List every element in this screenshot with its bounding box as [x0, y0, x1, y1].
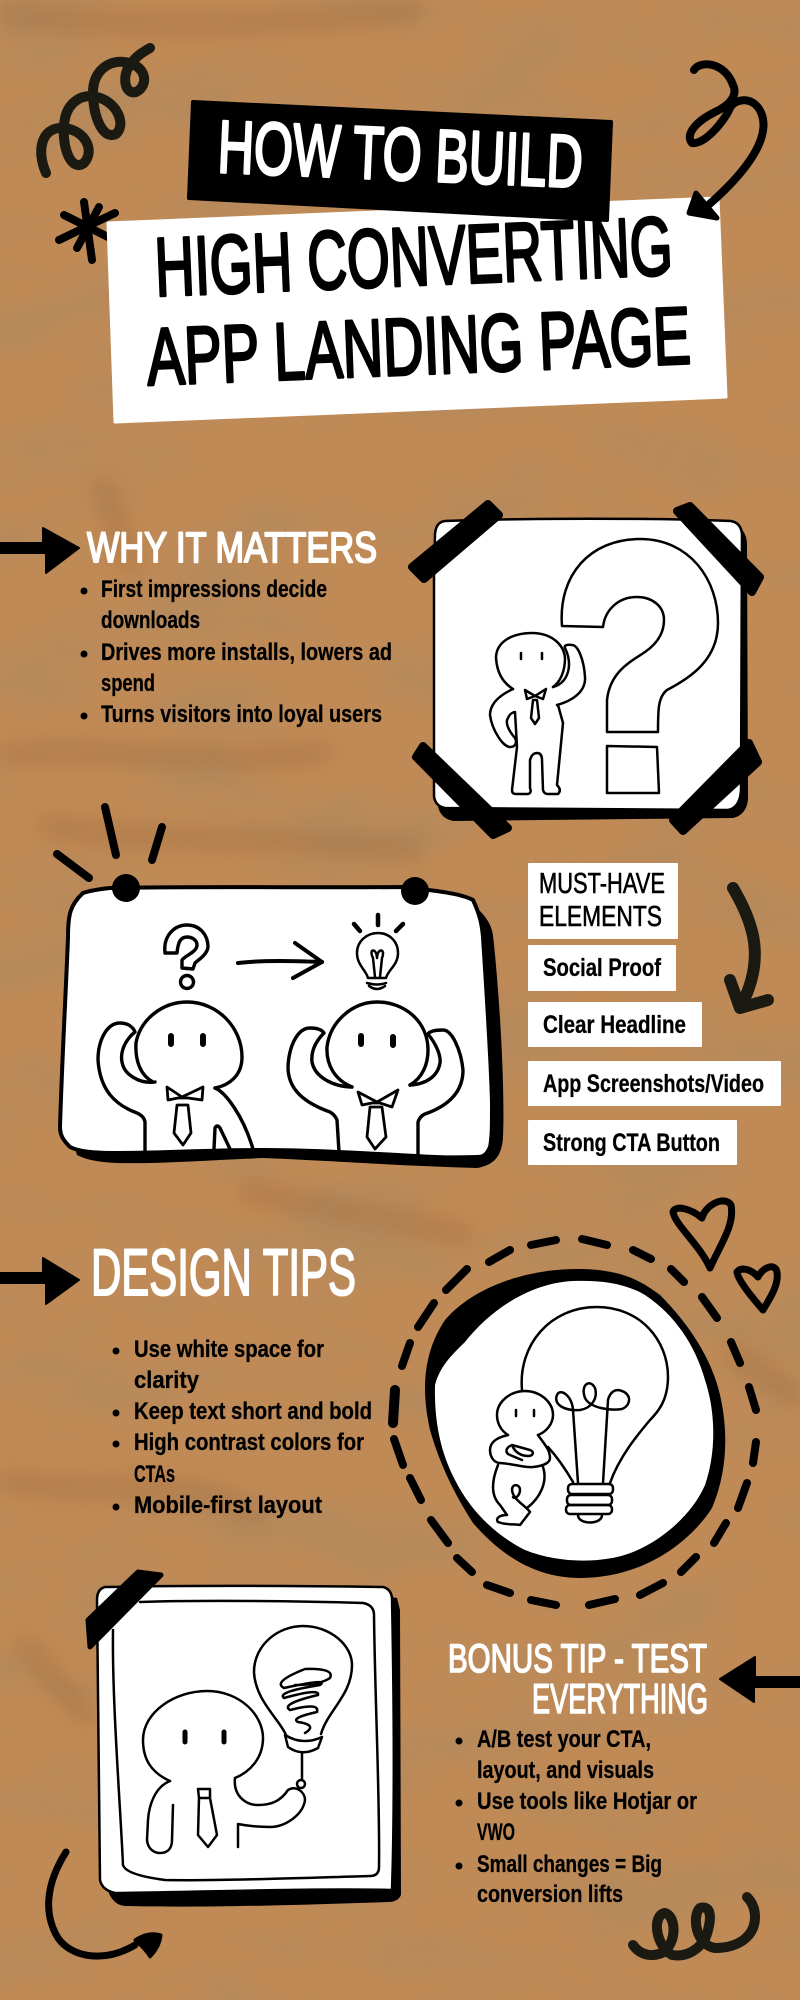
text block: why it matters bullets: First impressions decide [101, 576, 327, 603]
label: must-have elements [528, 863, 678, 939]
arrow: bonus tip [720, 1657, 800, 1702]
text block: design tips bullets: High contrast colors for [134, 1429, 364, 1456]
text block: bonus tip bullets: Use tools like Hotjar or [477, 1788, 697, 1815]
tape: top right [677, 506, 760, 592]
decoration: dashed ring [393, 1239, 756, 1605]
text block: bonus tip bullets: Small changes = Big [477, 1851, 662, 1878]
icon: small question mark [165, 925, 208, 988]
heading: bonus tip - test everything [448, 1637, 708, 1722]
title line: How To Build: HOW TO BUILD [216, 105, 584, 203]
circle white [435, 1281, 713, 1561]
figure: thinking person [98, 1002, 253, 1150]
decoration: asterisk [59, 202, 115, 260]
text block: bonus tip bullets: layout, and visuals [477, 1757, 654, 1784]
black title banner [189, 102, 611, 220]
tape: bottom left [416, 746, 508, 835]
text block: design tips bullets: Keep text short and bold [134, 1398, 372, 1425]
heading: bonus tip - test everything: BONUS TIP - TEST [448, 1637, 707, 1681]
icon: small light bulb [354, 915, 403, 989]
icon: small heart [737, 1267, 777, 1310]
text block: bonus tip bullets: A/B test your CTA, [477, 1726, 651, 1753]
icon: person thinking [490, 633, 585, 794]
text block: design tips bullets: Use white space for [134, 1336, 324, 1363]
arrow: design tips [0, 1258, 79, 1304]
label: social proof [528, 945, 676, 991]
heading: design tips: DESIGN TIPS [91, 1235, 356, 1309]
tape: top left [412, 504, 499, 579]
text block: design tips bullets: Mobile-first layout [134, 1492, 322, 1519]
text block: bonus tip bullets: VWO [477, 1819, 515, 1846]
text block: bonus tip bullets [456, 1726, 697, 1908]
icon: big question mark [562, 539, 718, 793]
label: social proof: Social Proof [543, 954, 662, 982]
heading: why it matters: WHY IT MATTERS [87, 524, 377, 572]
text block: design tips bullets: CTAs [134, 1461, 175, 1488]
text block: why it matters bullets: spend [101, 670, 155, 697]
icon: big bulb with filament [522, 1307, 668, 1522]
label: strong cta button [528, 1120, 737, 1165]
text block: design tips bullets: clarity [134, 1367, 200, 1394]
text block: why it matters bullets: Turns visitors into loyal users [101, 701, 382, 728]
circle shadow [425, 1269, 725, 1578]
panel: bonus tip card [88, 1572, 401, 1907]
icon: large heart [673, 1201, 732, 1268]
pin: right [401, 877, 429, 905]
text block: bonus tip bullets: conversion lifts [477, 1881, 623, 1908]
label: must-have elements: ELEMENTS [539, 901, 662, 933]
arrow: question to idea [238, 943, 322, 978]
panel: must-have elements list [528, 863, 781, 1165]
heading: bonus tip - test everything: EVERYTHING [532, 1675, 708, 1722]
tape: bottom right [673, 743, 758, 831]
figure: person leaning on bulb [490, 1391, 553, 1525]
arrow: bottom left curved [49, 1852, 161, 1957]
arrow: curved down beside list [730, 888, 768, 1008]
icon: bulb with spring filament [254, 1626, 352, 1788]
panel: question to idea card [60, 874, 503, 1168]
decoration: curl top left [41, 48, 150, 173]
panel: question mark card [412, 504, 760, 835]
decoration: squiggle bottom right [633, 1897, 755, 1955]
text block: why it matters bullets: downloads [101, 607, 200, 634]
pin: left [112, 874, 140, 902]
text block: why it matters bullets [80, 576, 392, 728]
label: app screenshots/video [528, 1061, 781, 1106]
arrow: why it matters [0, 528, 79, 573]
label: clear headline [528, 1002, 702, 1047]
decoration: burst rays [57, 807, 162, 878]
tape [88, 1572, 161, 1647]
inner frame [113, 1601, 379, 1880]
figure: person holding bulb [143, 1691, 305, 1853]
label: strong cta button: Strong CTA Button [543, 1129, 720, 1157]
white title panel [108, 198, 726, 422]
label: must-have elements: MUST-HAVE [539, 868, 665, 900]
figure: enlightened person [288, 1002, 463, 1157]
panel: light bulb circle [393, 1239, 756, 1605]
text block: why it matters bullets: Drives more installs, lowers ad [101, 639, 392, 666]
text block: design tips bullets [112, 1336, 372, 1519]
label: clear headline: Clear Headline [543, 1011, 686, 1039]
arrow: top right curl pointing to title [689, 64, 763, 218]
